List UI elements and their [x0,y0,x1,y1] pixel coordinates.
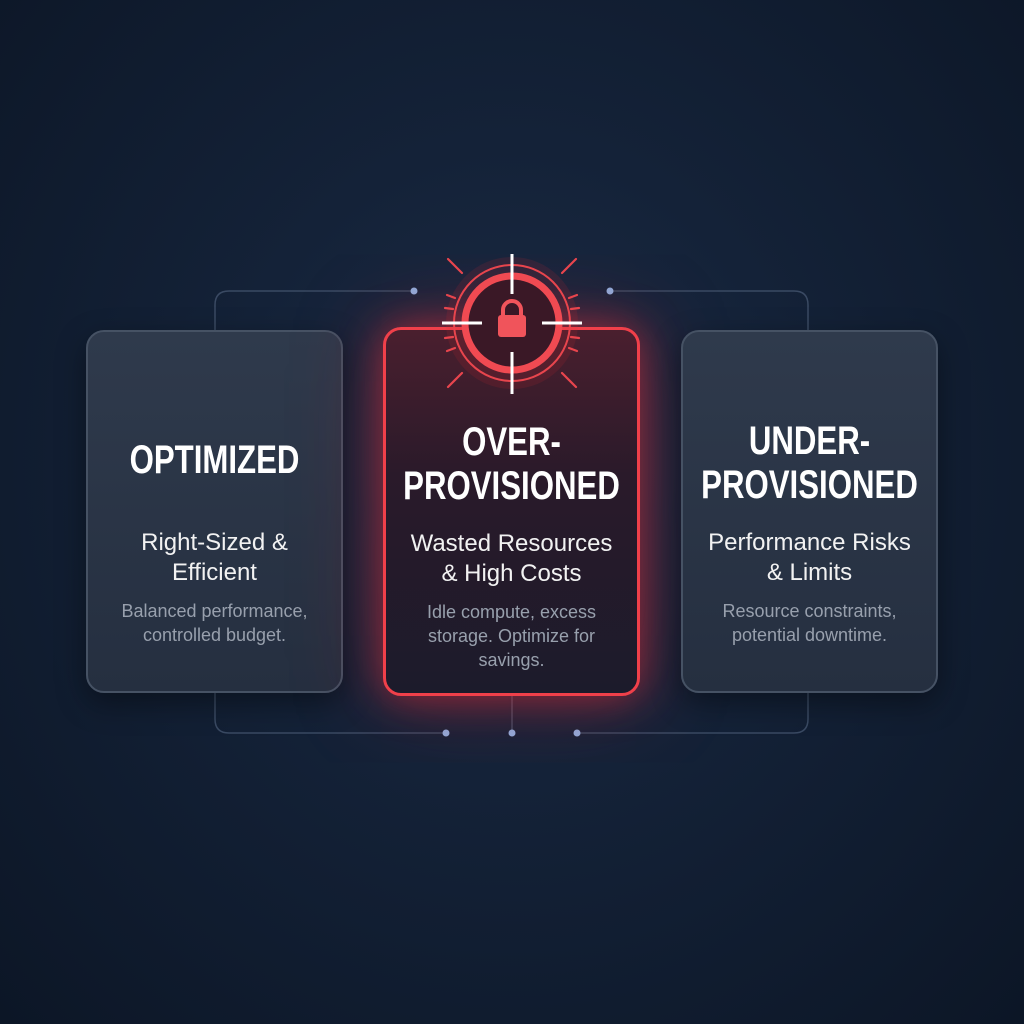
subtitle [708,529,911,586]
heading: over-provisioned: OVER- [462,420,561,464]
description [121,601,308,645]
description: controlled budget. [143,625,286,645]
subtitle: Performance Risks [708,529,911,556]
subtitle [141,529,288,586]
description: potential downtime. [732,625,887,645]
description: storage. Optimize for [428,626,595,646]
heading: under-provisioned [701,419,918,507]
description: Idle compute, excess [427,602,596,622]
description: Balanced performance, [121,601,308,621]
icon: target lock [442,254,582,394]
panel: over-provisioned [383,327,640,696]
heading: optimized: OPTIMIZED [130,438,299,482]
subtitle: & Limits [767,559,852,586]
heading: under-provisioned: PROVISIONED [701,463,918,507]
subtitle: Wasted Resources [411,530,612,557]
subtitle: & High Costs [441,560,582,587]
description [427,602,596,670]
panel: under-provisioned [681,330,938,693]
subtitle: Right-Sized & [141,529,288,556]
subtitle: Efficient [172,559,257,586]
heading: over-provisioned: PROVISIONED [403,464,620,508]
description [722,601,897,645]
subtitle [410,530,612,587]
description: Resource constraints, [722,601,897,621]
panel: optimized [86,330,343,693]
heading: under-provisioned: UNDER- [749,419,870,463]
description: savings. [478,650,545,670]
heading: over-provisioned [403,420,620,508]
